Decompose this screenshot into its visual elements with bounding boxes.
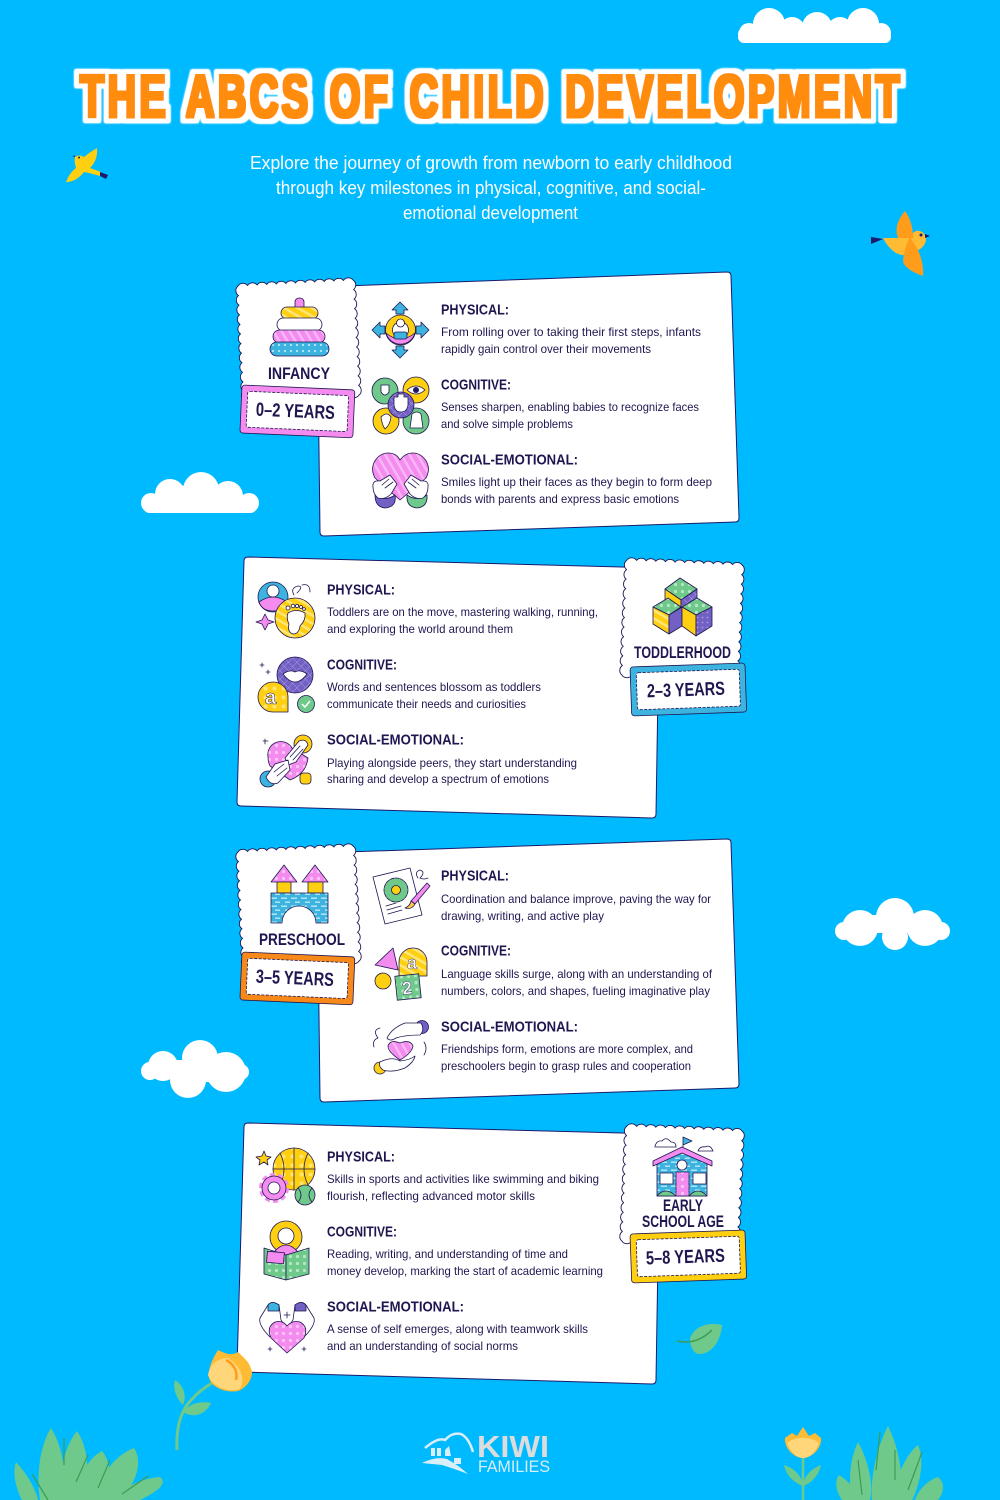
cognitive <box>441 376 699 431</box>
icon: speech and letter <box>258 657 314 712</box>
physical: Coordination and balance improve, paving the way for <box>441 892 711 906</box>
physical <box>441 867 711 923</box>
physical: flourish, reflecting advanced motor skills <box>327 1189 535 1203</box>
age badge: 5–8 YEARS <box>646 1246 725 1269</box>
icon: yellow bird <box>66 148 108 182</box>
cognitive: Language skills surge, along with an understanding of <box>441 967 713 981</box>
cognitive: numbers, colors, and shapes, fueling imaginative play <box>441 984 710 998</box>
social-emotional: sharing and develop a spectrum of emotions <box>327 772 549 786</box>
subtitle <box>250 153 732 223</box>
age badge <box>630 663 747 716</box>
panel: toddlerhood <box>237 557 747 818</box>
cognitive: money develop, marking the start of academic learning <box>327 1264 603 1278</box>
cognitive <box>327 656 541 711</box>
social-emotional <box>441 451 712 506</box>
social-emotional: SOCIAL-EMOTIONAL: <box>441 451 578 468</box>
stage name: INFANCY <box>268 364 331 383</box>
cognitive: COGNITIVE: <box>441 376 511 393</box>
icon: stacking rings <box>270 298 329 356</box>
physical: PHYSICAL: <box>441 301 509 318</box>
age badge <box>240 385 355 438</box>
icon: speech and letter: a <box>265 687 277 709</box>
age badge <box>630 1230 747 1283</box>
social-emotional: A sense of self emerges, along with teamwork skills <box>327 1322 588 1336</box>
icon: sports balls and gear <box>256 1148 315 1205</box>
physical: PHYSICAL: <box>441 867 509 884</box>
card background <box>317 272 739 536</box>
cloud: top right <box>738 8 891 43</box>
icon: school house <box>653 1137 713 1196</box>
icon: movement arrows <box>372 302 429 358</box>
icon: left bush <box>14 1428 163 1500</box>
stamp: infancy <box>235 277 362 404</box>
icon: right flower <box>784 1427 821 1500</box>
physical: From rolling over to taking their first steps, infants <box>441 325 701 339</box>
icon: five senses <box>372 377 429 434</box>
icon: holding hands <box>260 735 312 787</box>
icon: letters and shapes: 2 <box>401 978 413 999</box>
card background <box>317 839 739 1102</box>
cognitive: COGNITIVE: <box>327 656 397 673</box>
age badge <box>240 952 355 1005</box>
social-emotional <box>441 1018 693 1073</box>
icon: baby and footprint <box>256 582 315 638</box>
stage name: SCHOOL AGE <box>642 1212 724 1231</box>
cloud: right middle <box>835 898 950 950</box>
cognitive: and solve simple problems <box>441 417 573 431</box>
cognitive <box>441 942 713 998</box>
social-emotional: Friendships form, emotions are more complex, and <box>441 1042 693 1056</box>
stamp: early school age <box>619 1123 745 1249</box>
physical: PHYSICAL: <box>327 1148 395 1165</box>
social-emotional <box>327 731 577 786</box>
subtitle: through key milestones in physical, cognitive, and social- <box>276 178 706 198</box>
social-emotional: SOCIAL-EMOTIONAL: <box>441 1018 578 1035</box>
icon: block castle <box>271 865 328 923</box>
panel: early school age <box>237 1123 747 1384</box>
card background <box>237 1123 660 1384</box>
cloud: left upper <box>141 472 259 513</box>
physical: and exploring the world around them <box>327 622 513 636</box>
age badge: 3–5 YEARS <box>255 967 334 991</box>
icon: right bush <box>836 1426 943 1500</box>
social-emotional: bonds with parents and express basic emotions <box>441 492 679 506</box>
physical: Skills in sports and activities like swimming and biking <box>327 1172 599 1186</box>
physical: drawing, writing, and active play <box>441 909 604 923</box>
logo: Kiwi Families: FAMILIES <box>478 1458 550 1476</box>
stamp: preschool <box>235 843 362 970</box>
icon: hands and heart <box>374 1020 428 1074</box>
panel: preschool <box>235 839 739 1102</box>
icon: hands holding heart <box>260 1302 314 1353</box>
stamp: toddlerhood <box>619 557 745 683</box>
subtitle: emotional development <box>403 203 578 223</box>
cognitive <box>327 1223 603 1278</box>
icon: letters and shapes: a <box>407 953 418 973</box>
social-emotional: Playing alongside peers, they start understanding <box>327 756 577 770</box>
social-emotional: Smiles light up their faces as they begin to form deep <box>441 475 712 489</box>
stage name: EARLY <box>663 1196 703 1215</box>
cognitive: COGNITIVE: <box>327 1223 397 1240</box>
icon: child reading <box>264 1221 309 1280</box>
icon: leaf <box>677 1324 722 1354</box>
icon: letters and shapes <box>375 948 427 1000</box>
icon: heart with hands <box>373 453 428 508</box>
physical: rapidly gain control over their movements <box>441 342 651 356</box>
icon: blocks <box>653 578 712 636</box>
social-emotional: preschoolers begin to grasp rules and cooperation <box>441 1059 691 1073</box>
panel: infancy <box>235 272 739 536</box>
logo: Kiwi Families: KIWI <box>477 1429 549 1464</box>
cognitive: Words and sentences blossom as toddlers <box>327 680 541 694</box>
stage name: PRESCHOOL <box>259 930 345 949</box>
subtitle: Explore the journey of growth from newborn to early childhood <box>250 153 732 173</box>
physical <box>327 581 598 636</box>
physical: PHYSICAL: <box>327 581 395 598</box>
cognitive: COGNITIVE: <box>441 942 511 959</box>
social-emotional: SOCIAL-EMOTIONAL: <box>327 731 464 748</box>
age badge: 2–3 YEARS <box>647 679 725 702</box>
cognitive: Reading, writing, and understanding of time and <box>327 1247 568 1261</box>
cognitive: communicate their needs and curiosities <box>327 697 526 711</box>
physical <box>327 1148 599 1203</box>
physical: Toddlers are on the move, mastering walking, running, <box>327 605 598 619</box>
stage name: TODDLERHOOD <box>634 643 731 662</box>
stage name <box>642 1196 724 1231</box>
card background <box>237 557 660 818</box>
icon: left flower <box>174 1350 252 1450</box>
age badge: 0–2 YEARS <box>255 400 335 424</box>
social-emotional: SOCIAL-EMOTIONAL: <box>327 1298 464 1315</box>
cloud: left lower <box>141 1040 249 1098</box>
cognitive: Senses sharpen, enabling babies to recognize faces <box>441 400 699 414</box>
icon: orange bird <box>871 211 930 276</box>
physical <box>441 301 701 356</box>
social-emotional <box>327 1298 588 1353</box>
logo: Kiwi Families <box>422 1429 550 1476</box>
icon: drawing <box>373 868 430 924</box>
social-emotional: and an understanding of social norms <box>327 1339 518 1353</box>
